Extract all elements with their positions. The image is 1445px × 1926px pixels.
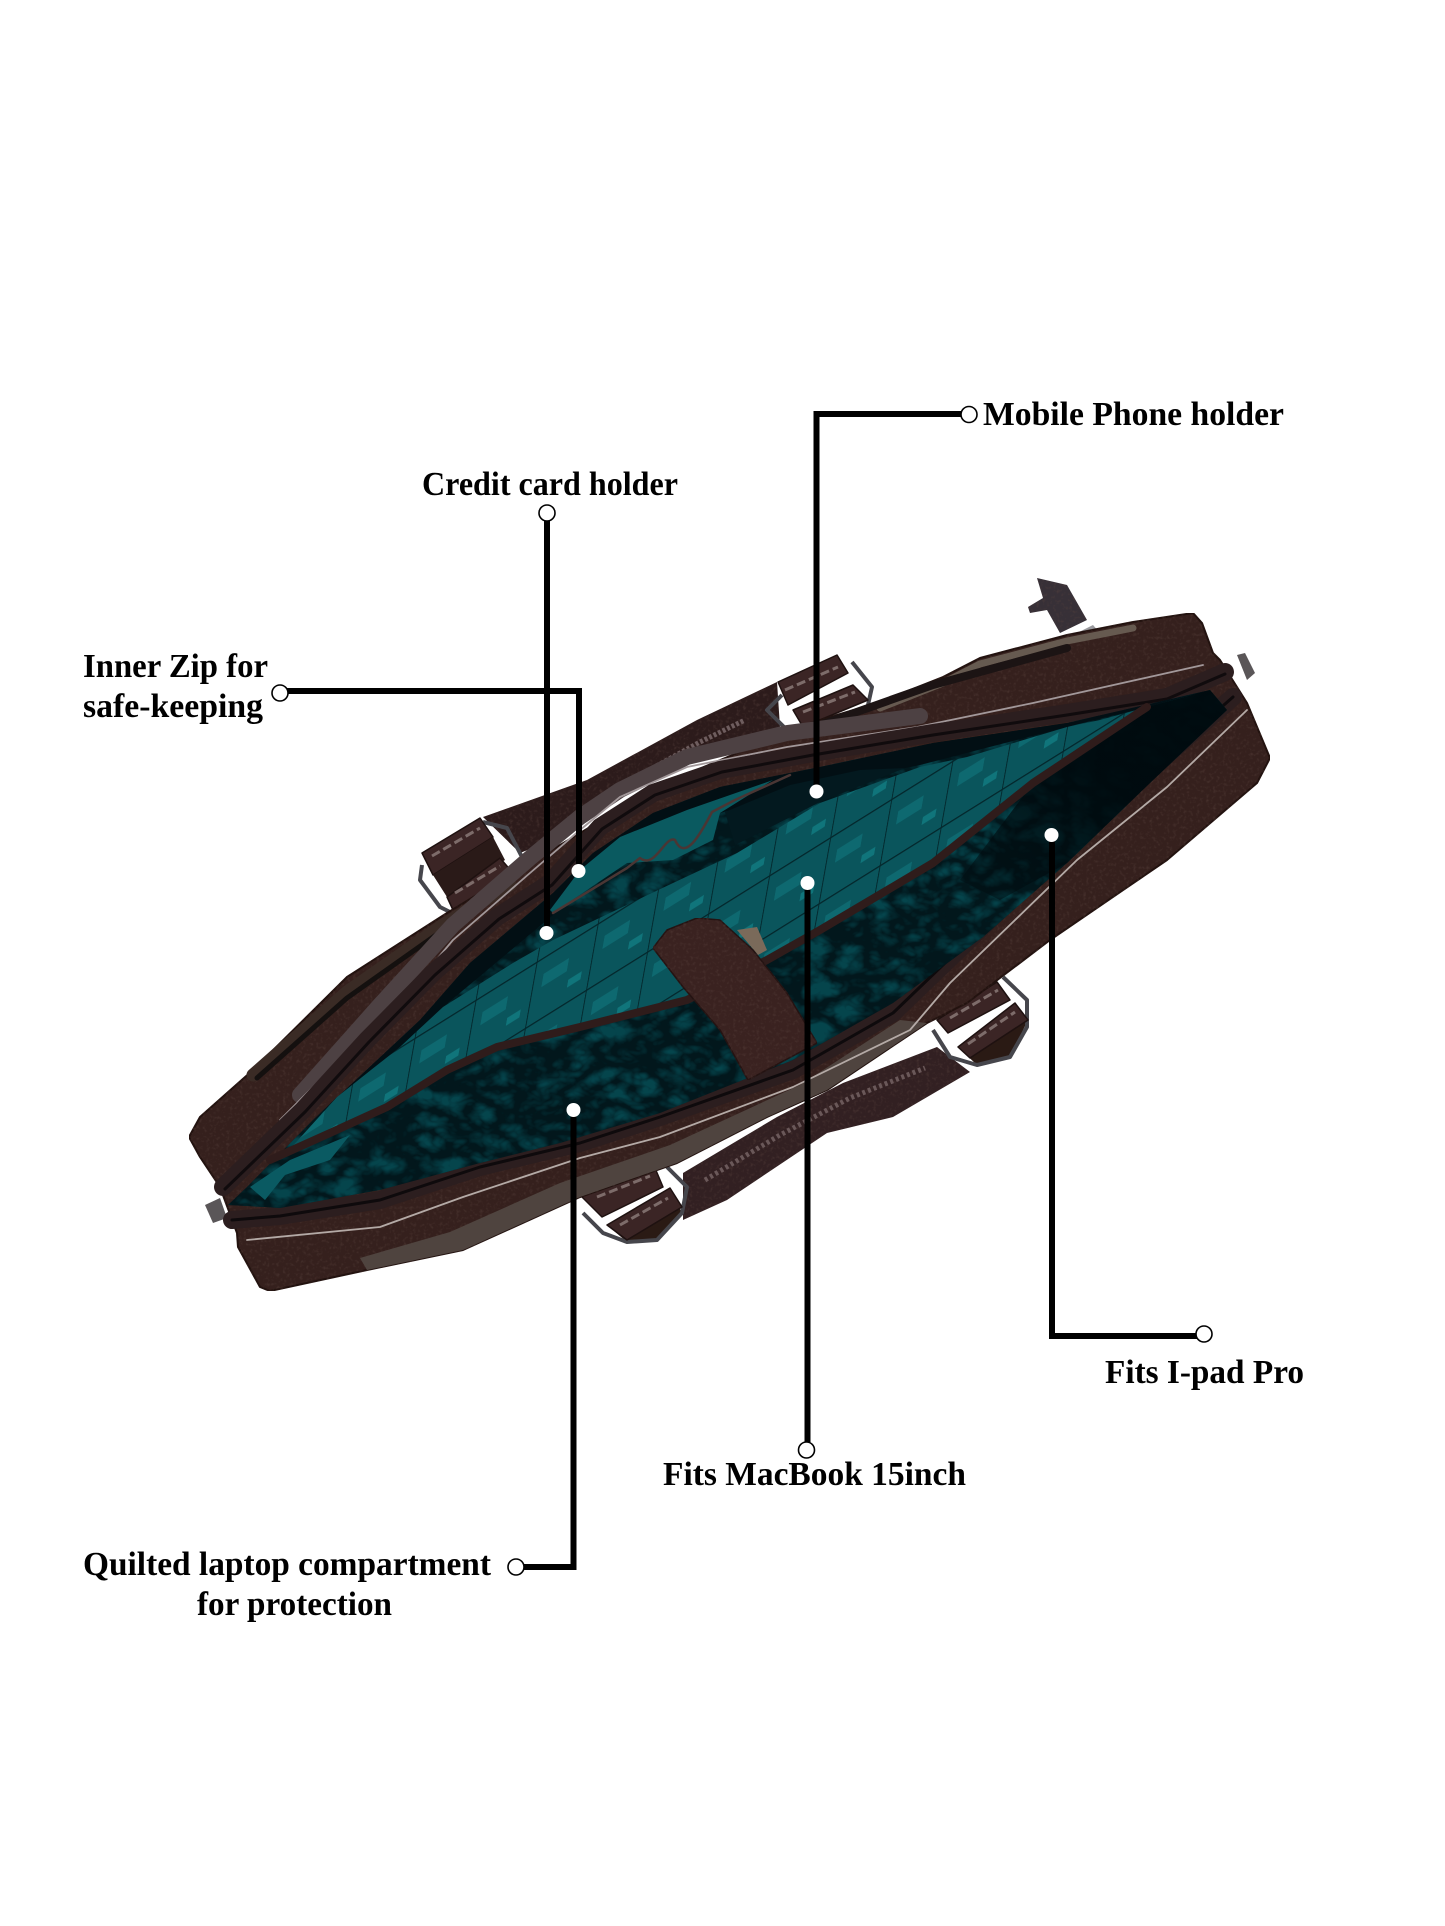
main zipper upper: [223, 672, 1225, 1187]
top rim highlight: [880, 628, 1133, 708]
callout: credit card holder: [422, 466, 678, 940]
credit card pocket: [550, 780, 773, 913]
top shade band: [313, 690, 1210, 1120]
bag body: [189, 613, 1270, 1291]
lid stitching: [280, 665, 1203, 1120]
callout: ipad: Fits I-pad Pro: [1105, 1354, 1304, 1391]
small brand label: [737, 927, 767, 955]
main zipper lower: [232, 697, 1233, 1220]
callout: credit card holder: Credit card holder: [422, 466, 678, 503]
top handle: [483, 682, 780, 853]
callout: mobile phone holder: Mobile Phone holder: [983, 396, 1284, 433]
callout: macbook: [663, 876, 966, 1493]
callout: inner zip: Inner Zip for: [83, 648, 268, 685]
bottom handle: [683, 1047, 970, 1220]
right compartment shadow: [960, 690, 1227, 900]
quilted laptop panel: [280, 707, 1147, 1160]
bottom right buckle: [933, 977, 1028, 1065]
callout: inner zip: [83, 648, 586, 878]
bag opening: [228, 690, 1227, 1208]
back zip teeth left: [257, 930, 443, 1078]
callout: quilted compartment: Quilted laptop compartment: [83, 1546, 492, 1583]
top right buckle: [767, 655, 872, 728]
back zip right: [800, 648, 1067, 732]
callout: mobile phone holder: [810, 396, 1284, 798]
back zip left: [253, 885, 510, 1075]
base lower grey strip: [360, 1020, 927, 1270]
main zipper lower teeth: [232, 697, 1233, 1220]
pocket slits: [553, 775, 790, 913]
callout: quilted compartment: [83, 1103, 580, 1623]
dark mobile pocket: [725, 768, 905, 845]
base stitching: [247, 710, 1247, 1240]
callout: inner zip: safe-keeping: [83, 688, 263, 725]
main zipper upper teeth: [225, 674, 1225, 1189]
leather strap: [653, 918, 817, 1080]
callout: ipad: [1044, 828, 1304, 1391]
bag photo: [189, 578, 1270, 1291]
callout: quilted compartment: for protection: [197, 1586, 392, 1623]
divider piping: [270, 707, 1147, 1160]
right zip puller: [1237, 653, 1255, 680]
top left buckle: [420, 818, 522, 913]
callout: macbook: Fits MacBook 15inch: [663, 1456, 966, 1493]
left zip puller: [205, 1198, 227, 1223]
lid sheen band: [300, 716, 920, 1095]
bottom left buckle: [580, 1167, 687, 1242]
zipper pull: [1028, 578, 1100, 648]
lower left lining: [250, 1135, 350, 1200]
